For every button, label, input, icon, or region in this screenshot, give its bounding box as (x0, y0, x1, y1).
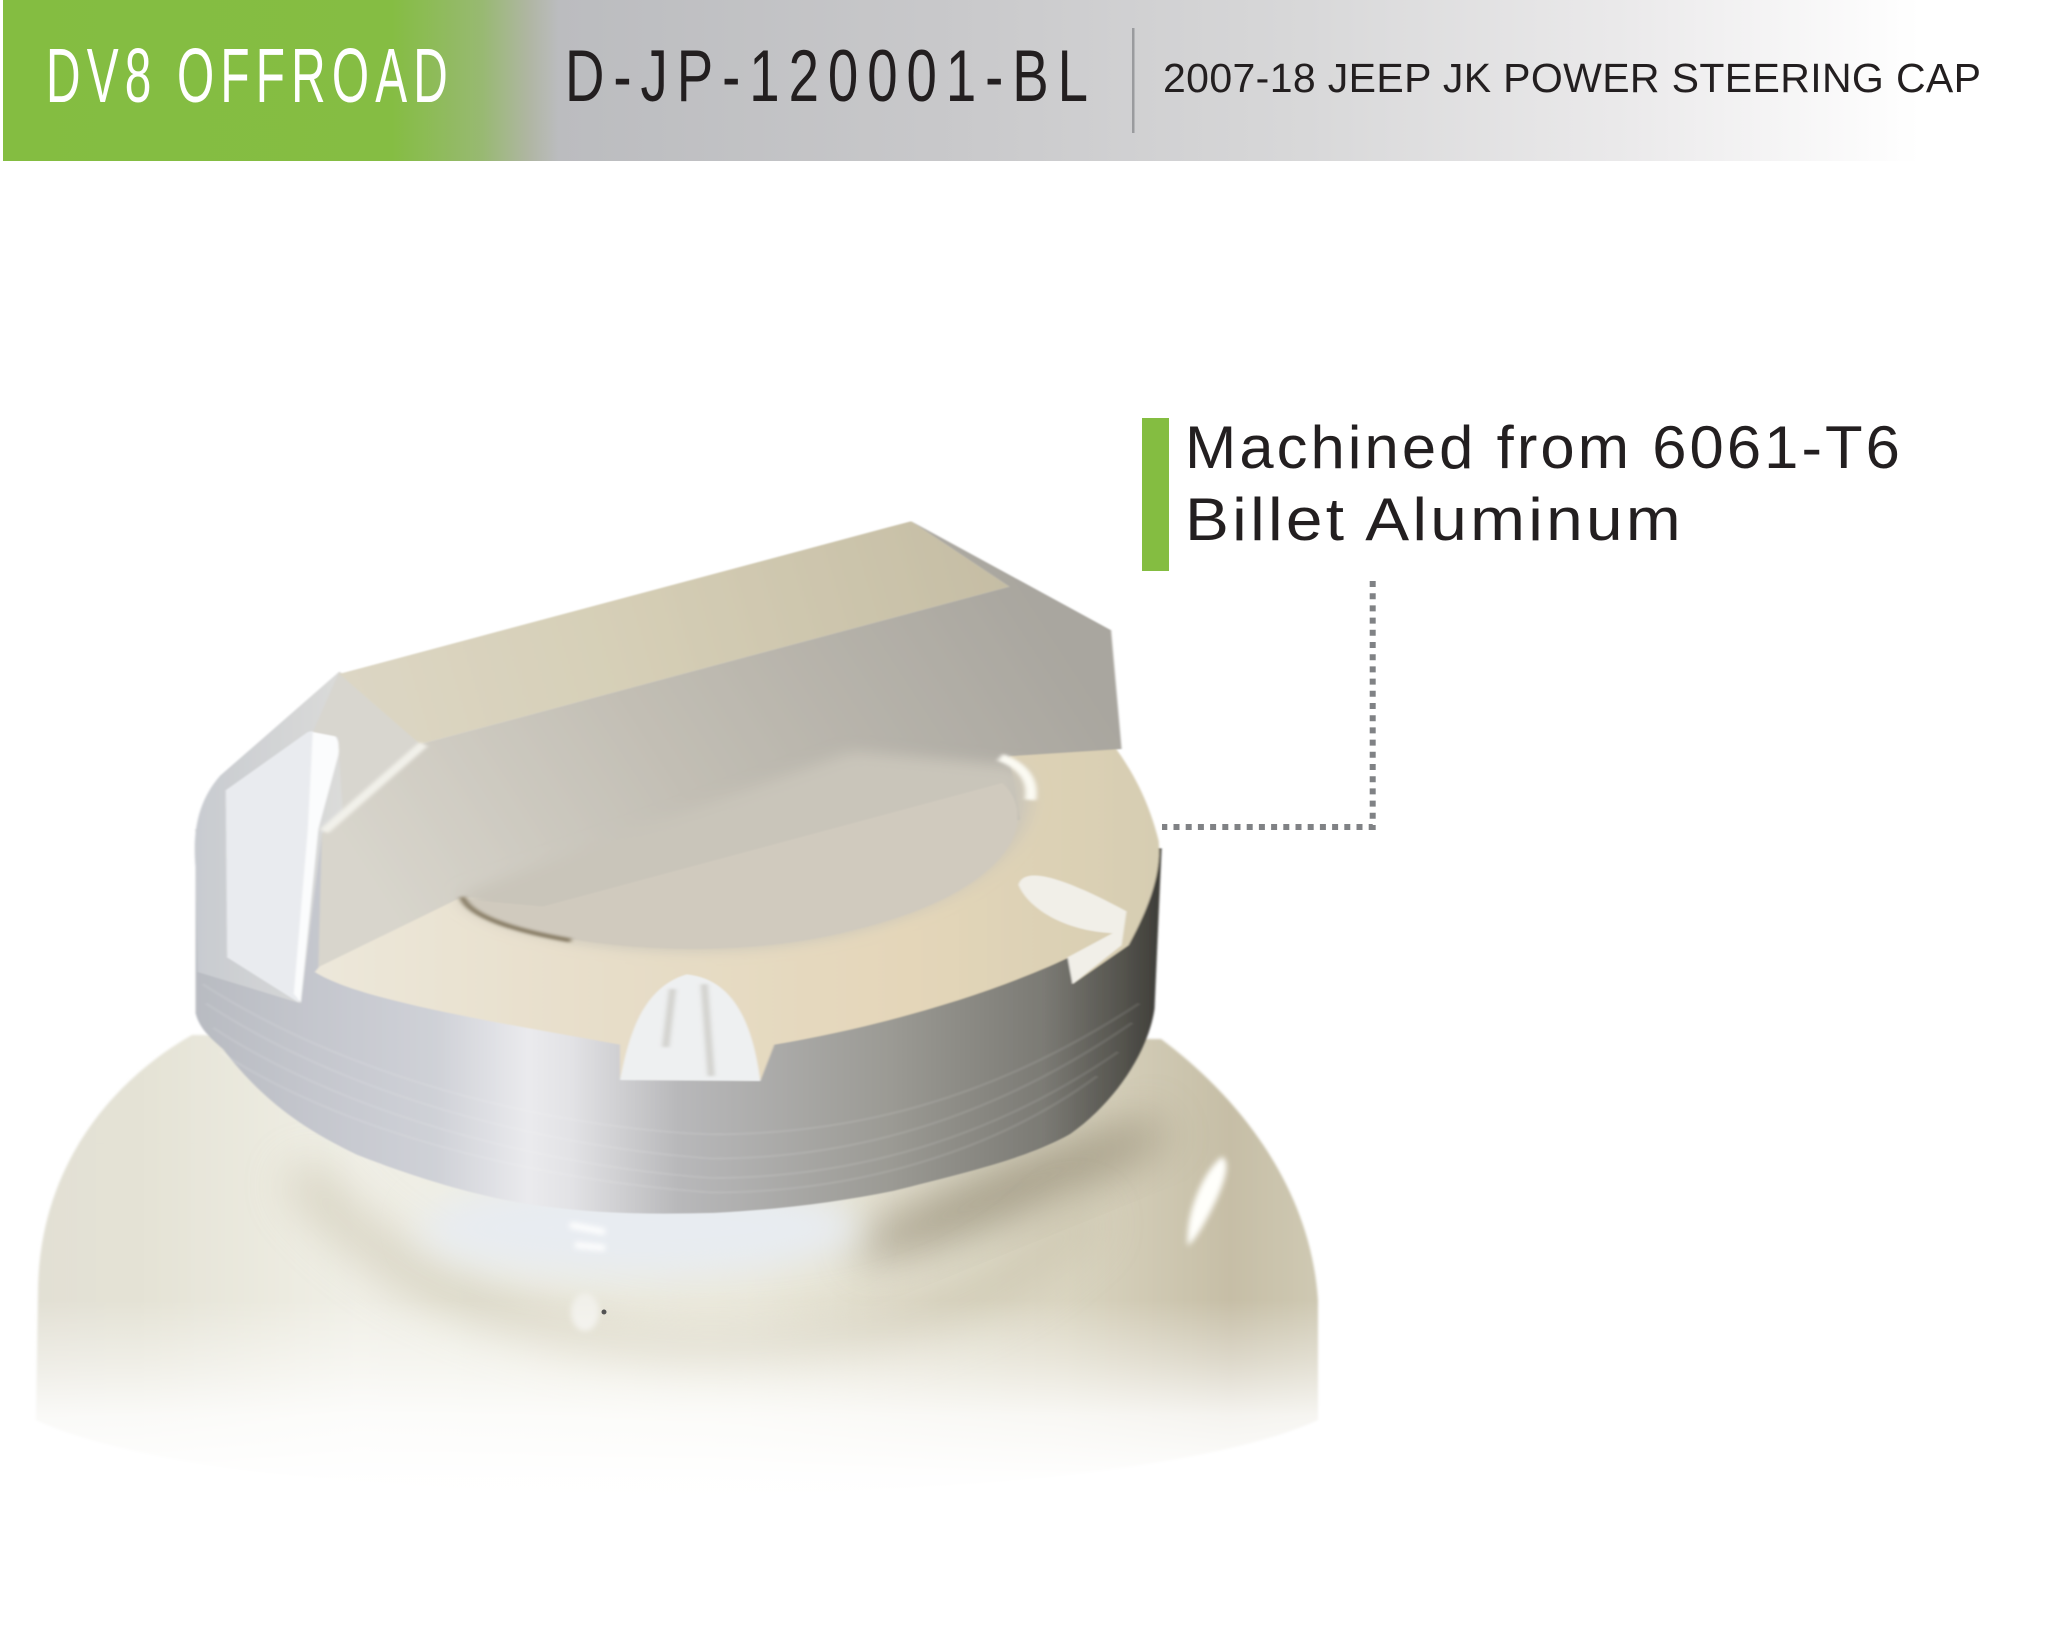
callout text: Billet Aluminum (1185, 486, 1684, 553)
callout text: Machined from 6061-T6 (1185, 414, 1903, 481)
callout: material (1142, 414, 1903, 571)
left notch (226, 731, 339, 1003)
reservoir bottle (0, 1035, 1400, 1512)
cap band (196, 819, 1162, 1214)
dotted leader line (1162, 581, 1373, 827)
product photo: power steering cap on reservoir (0, 521, 1400, 1512)
callout accent bar (1142, 418, 1169, 571)
cap top face (315, 722, 1159, 1081)
scallop disc lower (462, 783, 1018, 949)
part number: D-JP-120001-BL (565, 36, 1097, 117)
aluminum cap (195, 521, 1162, 1214)
knob front slope (318, 521, 1122, 967)
slope edge highlight (324, 744, 424, 831)
scallop disc upper (462, 751, 1029, 949)
left side block (195, 671, 420, 1003)
product name: 2007-18 JEEP JK POWER STEERING CAP (1163, 55, 1981, 101)
callout text (1185, 414, 1903, 553)
machining streaks (203, 984, 1139, 1193)
right notch (1018, 875, 1126, 984)
brand name: DV8 OFFROAD (46, 33, 454, 119)
knob back facet (339, 521, 1009, 744)
header bar (3, 0, 2048, 161)
left chamfer facet (313, 671, 420, 814)
fade to white (0, 1300, 1400, 1512)
front notch (620, 974, 760, 1081)
